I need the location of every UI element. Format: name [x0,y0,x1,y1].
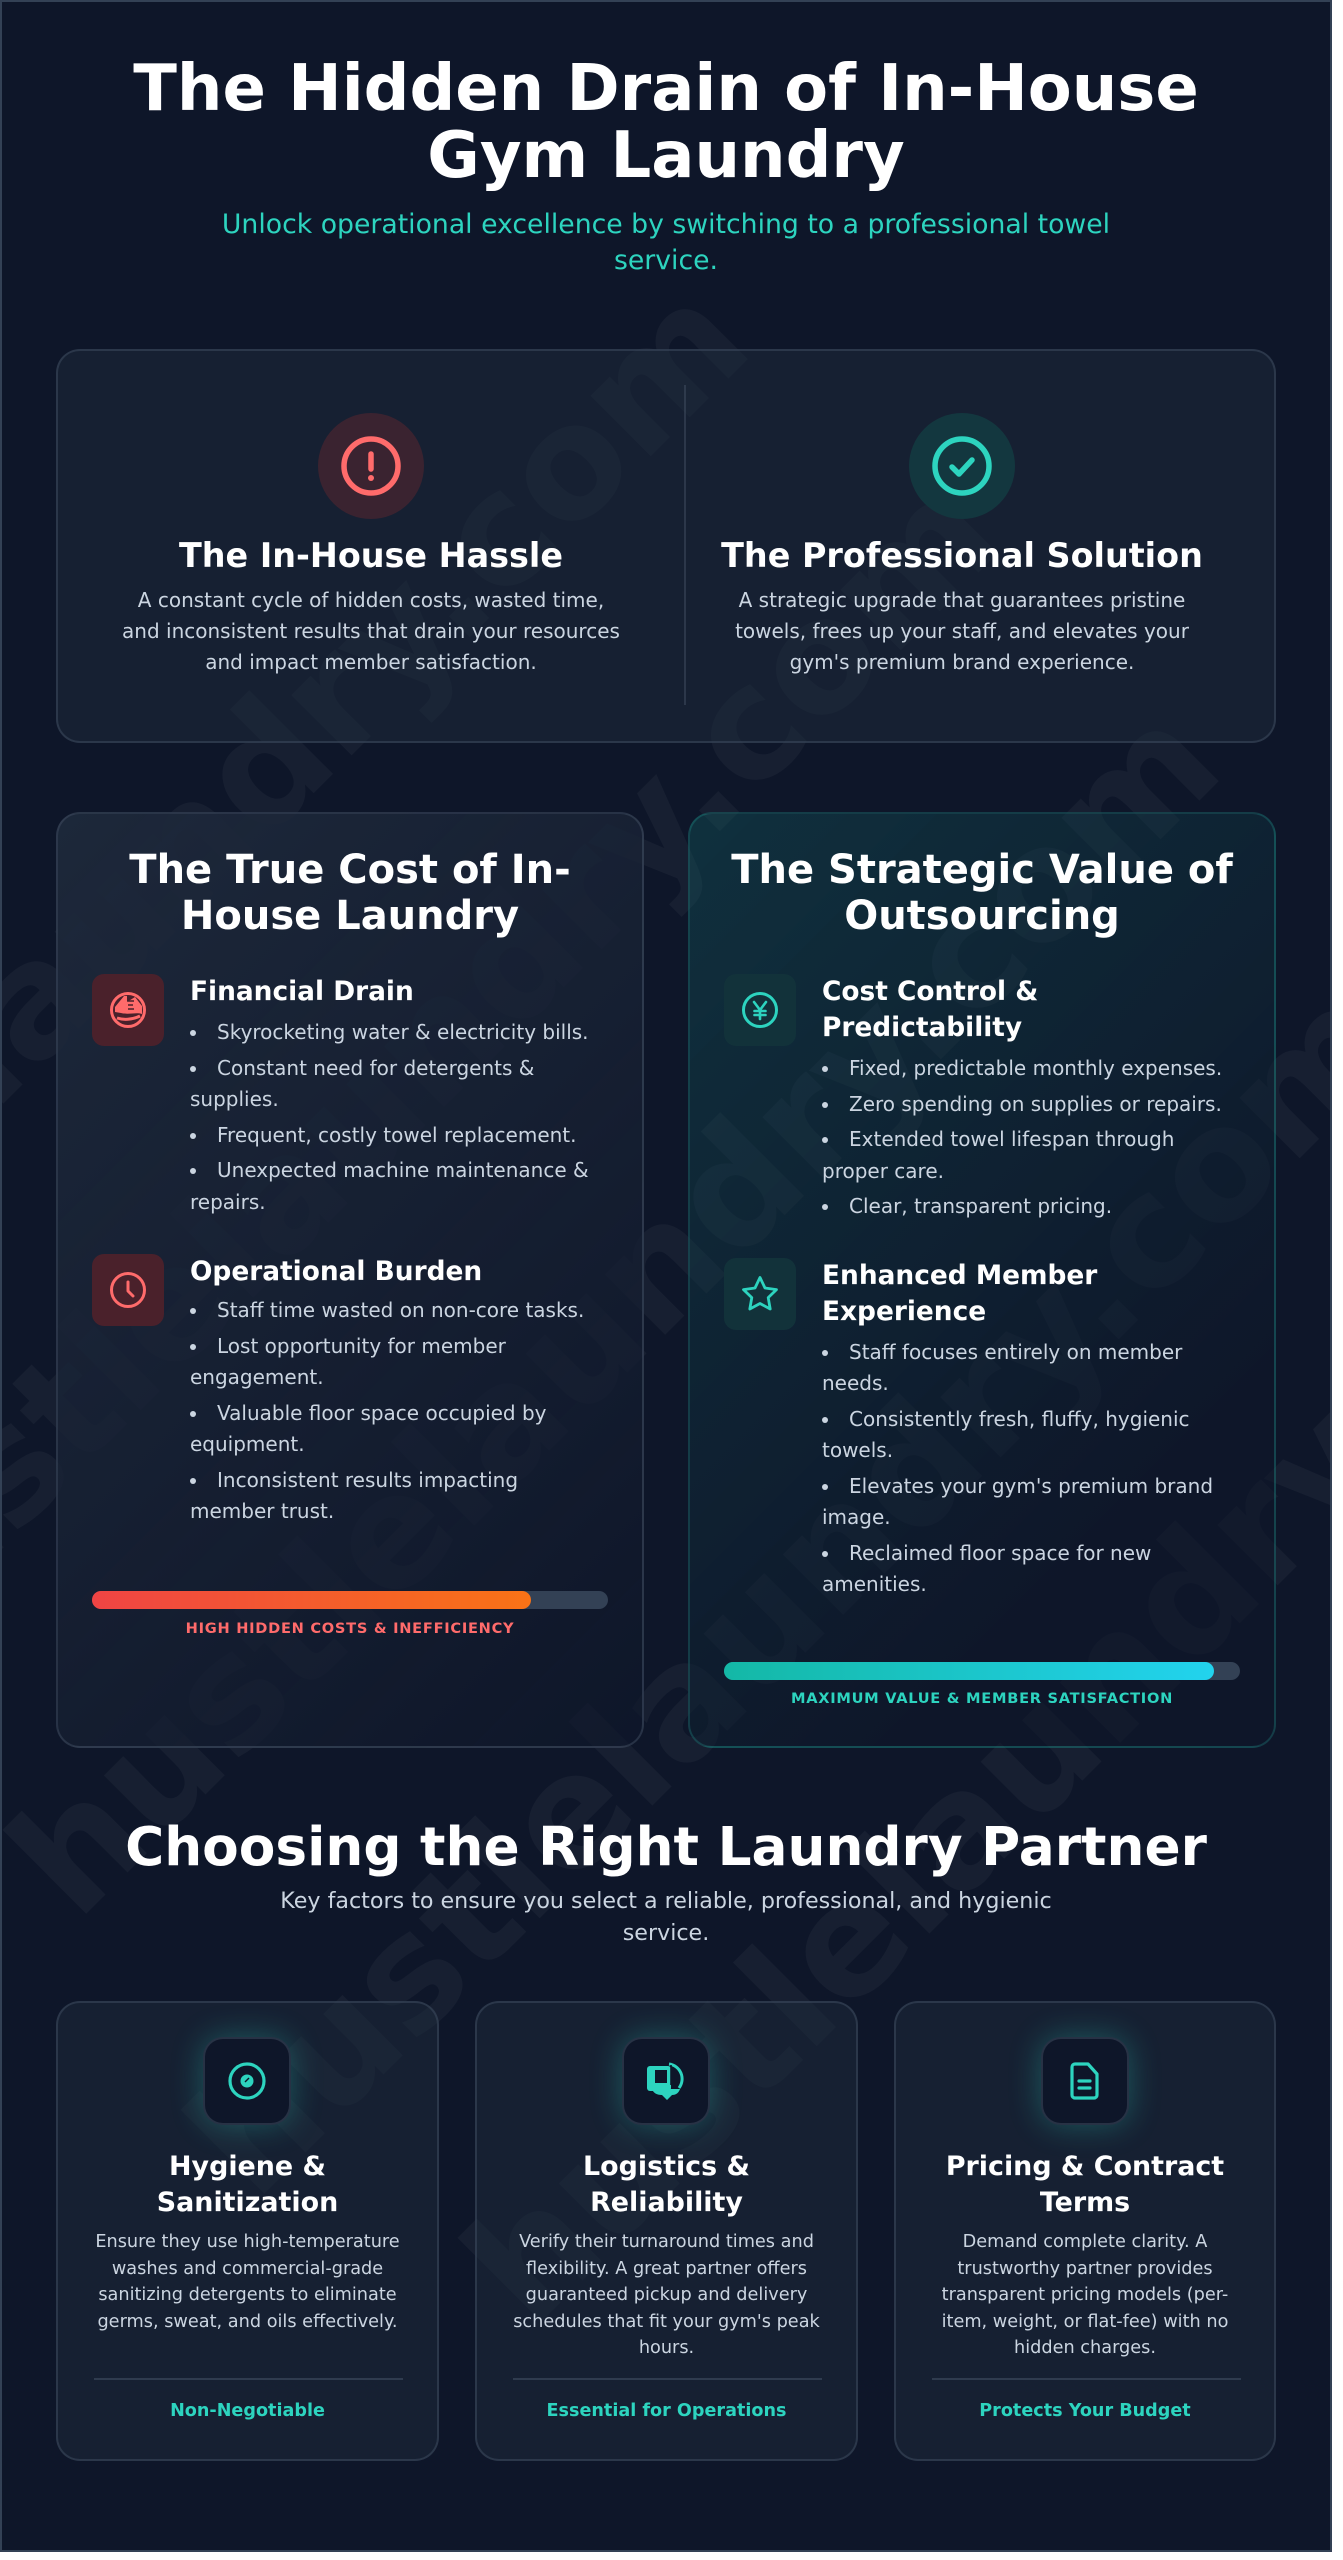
bullet list: Staff time wasted on non-core tasks. [217,1298,584,1322]
bar label: HIGH HIDDEN COSTS & INEFFICIENCY [186,1620,514,1637]
description: A constant cycle of hidden costs, wasted time, [138,588,604,612]
description: and inconsistent results that drain your resources [122,619,620,643]
tag: Protects Your Budget [979,2401,1191,2421]
heading: Enhanced Member [822,1260,1097,1291]
heading [157,2151,338,2218]
bullet list [822,1340,1213,1596]
tag: Essential for Operations [546,2401,786,2421]
text: hustlelaundry.com [0,670,1254,1949]
bullet list: Zero spending on supplies or repairs. [849,1092,1222,1116]
bullet list: image. [822,1505,891,1529]
icon: star [724,1258,796,1330]
description [122,588,620,674]
heading: Operational Burden [190,1256,482,1287]
heading: The True Cost of In- [129,847,571,893]
tag: Non-Negotiable [170,2401,325,2421]
heading [129,847,571,939]
description: A strategic upgrade that guarantees pristine [739,588,1185,612]
heading: Financial Drain [190,976,414,1007]
description: Ensure they use high-temperature [95,2232,400,2252]
icon: warning [318,413,424,519]
bullet list: member trust. [190,1499,334,1523]
subtitle [222,209,1110,276]
heading [822,976,1038,1043]
title: Gym Laundry [427,119,905,193]
description: gym's premium brand experience. [790,650,1134,674]
divider [513,2378,822,2380]
section title: Choosing the Right Laundry Partner [125,1816,1207,1878]
title [133,52,1199,193]
icon: clock [92,1254,164,1326]
section subtitle [280,1888,1052,1946]
icon: document [1041,2037,1129,2125]
heading: Predictability [822,1012,1022,1043]
bullet list: Valuable floor space occupied by [217,1401,547,1425]
title: The Hidden Drain of In-House [133,52,1199,126]
description: transparent pricing models (per- [942,2285,1228,2305]
bar label: MAXIMUM VALUE & MEMBER SATISFACTION [791,1690,1173,1707]
description: item, weight, or flat-fee) with no [942,2312,1228,2332]
description: washes and commercial-grade [112,2259,383,2279]
heading: Outsourcing [844,893,1120,939]
bullet list: Fixed, predictable monthly expenses. [849,1056,1222,1080]
icon: crossed-out money [92,974,164,1046]
heading [583,2151,750,2218]
bullet list: Constant need for detergents & [217,1056,534,1080]
card: logistics and reliability [475,2001,858,2461]
item: cost control [724,974,1222,1218]
item: enhanced member experience [724,1258,1213,1596]
divider [932,2378,1241,2380]
bullet list [822,1056,1222,1218]
bullet list: Unexpected machine maintenance & [217,1158,589,1182]
bullet list [190,1020,589,1214]
card: hygiene and sanitization [56,2001,439,2461]
description: hours. [639,2338,694,2358]
bullet list: amenities. [822,1572,927,1596]
description [95,2232,400,2332]
bullet list: Frequent, costly towel replacement. [217,1123,577,1147]
heading: Reliability [590,2187,743,2218]
bullet list: needs. [822,1371,889,1395]
bullet list: towels. [822,1438,893,1462]
panel: true cost of in-house laundry [56,812,644,1748]
bullet list: Consistently fresh, fluffy, hygienic [849,1407,1190,1431]
description: hidden charges. [1014,2338,1156,2358]
heading [731,847,1234,939]
bullet list [190,1298,584,1523]
description: and impact member satisfaction. [205,650,537,674]
heading: Sanitization [157,2187,338,2218]
description [735,588,1189,674]
description: sanitizing detergents to eliminate [98,2285,397,2305]
progress bar: maximum value [724,1662,1240,1680]
bullet list: Elevates your gym's premium brand [849,1474,1213,1498]
description: Verify their turnaround times and [519,2232,814,2252]
bullet list: Extended towel lifespan through [849,1127,1174,1151]
panel: hassle versus solution [56,349,1276,743]
icon: hygiene badge [203,2037,291,2125]
heading: The In-House Hassle [179,536,563,574]
heading: House Laundry [181,893,519,939]
item: financial drain [92,974,589,1214]
bullet list: Lost opportunity for member [217,1334,506,1358]
heading [946,2151,1224,2218]
heading: Experience [822,1296,986,1327]
heading: Pricing & Contract [946,2151,1224,2182]
heading: Hygiene & [169,2151,326,2182]
bullet list: equipment. [190,1432,305,1456]
description: trustworthy partner provides [957,2259,1213,2279]
bullet list: Staff focuses entirely on member [849,1340,1182,1364]
bullet list: Reclaimed floor space for new [849,1541,1151,1565]
item: operational burden [92,1254,584,1523]
heading: The Strategic Value of [731,847,1233,893]
bullet list: engagement. [190,1365,324,1389]
description: Demand complete clarity. A [963,2232,1207,2252]
bullet list: proper care. [822,1159,944,1183]
description: flexibility. A great partner offers [526,2259,807,2279]
heading [822,1260,1098,1327]
description: schedules that fit your gym's peak [513,2312,820,2332]
icon: delivery shield [622,2037,710,2125]
divider [94,2378,403,2380]
bullet list: repairs. [190,1190,266,1214]
progress bar: high hidden costs [92,1591,608,1609]
column: the in-house hassle [122,413,620,674]
subtitle: service. [614,245,718,276]
icon: yen coin [724,974,796,1046]
section subtitle: service. [623,1920,709,1946]
heading: Terms [1040,2187,1130,2218]
description [942,2232,1228,2358]
subtitle: Unlock operational excellence by switching to a professional towel [222,209,1110,240]
section subtitle: Key factors to ensure you select a reliable, professional, and hygienic [280,1888,1052,1914]
description: germs, sweat, and oils effectively. [97,2312,398,2332]
column: the professional solution [721,413,1203,674]
heading: Cost Control & [822,976,1038,1007]
bullet list: Clear, transparent pricing. [849,1194,1112,1218]
bullet list: supplies. [190,1087,279,1111]
description [513,2232,820,2358]
bullet list: Inconsistent results impacting [217,1468,518,1492]
description: guaranteed pickup and delivery [526,2285,807,2305]
heading: The Professional Solution [721,536,1203,574]
bullet list: Skyrocketing water & electricity bills. [217,1020,589,1044]
icon: check [909,413,1015,519]
description: towels, frees up your staff, and elevates your [735,619,1189,643]
card: pricing and contract terms [894,2001,1276,2461]
heading: Logistics & [583,2151,750,2182]
panel: strategic value of outsourcing [688,812,1276,1748]
divider [684,385,686,705]
